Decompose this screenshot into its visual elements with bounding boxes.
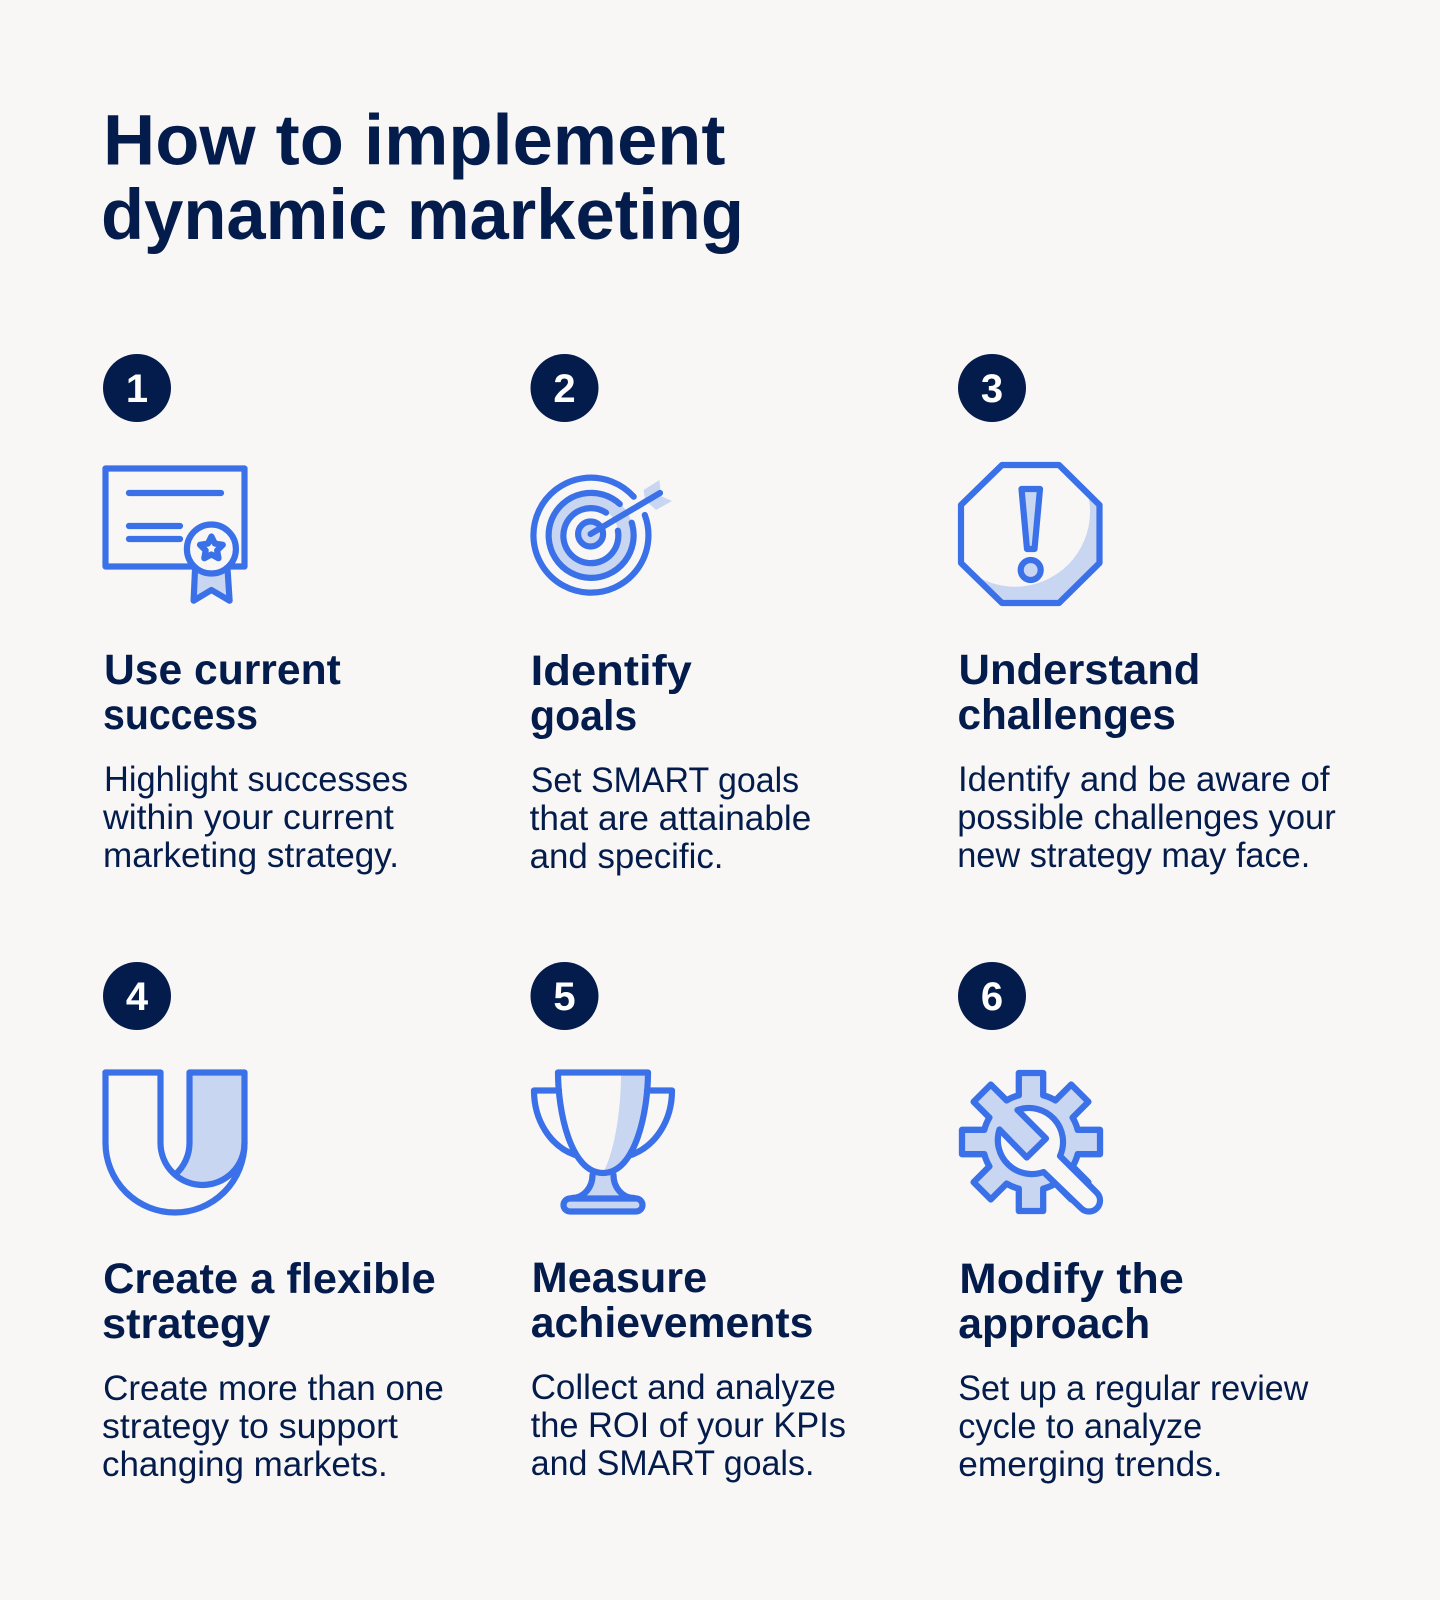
panel: step 2 identify goals bbox=[530, 354, 811, 876]
body text: and specific. bbox=[530, 837, 724, 876]
heading bbox=[531, 1254, 813, 1347]
panel: step 3 understand challenges bbox=[940, 354, 1336, 875]
body text: possible challenges your bbox=[957, 798, 1336, 837]
body text bbox=[102, 760, 408, 875]
body text bbox=[530, 761, 811, 876]
body text: marketing strategy. bbox=[103, 836, 399, 875]
icon: gear with wrench bbox=[962, 1073, 1100, 1212]
body text: that are attainable bbox=[530, 799, 811, 838]
number badge 5: 5 bbox=[553, 975, 576, 1019]
heading: Measure bbox=[532, 1254, 707, 1302]
panel: step 5 measure achievements bbox=[530, 962, 846, 1483]
number badge 3 bbox=[958, 354, 1026, 422]
heading: Use current bbox=[104, 646, 341, 694]
body text: and SMART goals. bbox=[531, 1444, 814, 1483]
body text: Identify and be aware of bbox=[958, 760, 1330, 799]
heading bbox=[958, 1255, 1184, 1348]
body text: Set up a regular review bbox=[958, 1369, 1309, 1408]
heading bbox=[102, 1255, 436, 1348]
body text: within your current bbox=[102, 798, 394, 837]
title bbox=[101, 102, 744, 255]
number badge 6 bbox=[958, 962, 1026, 1030]
body text: Create more than one bbox=[103, 1369, 444, 1408]
heading: strategy bbox=[102, 1300, 270, 1348]
number badge 2 bbox=[530, 354, 598, 422]
icon: octagon warning bbox=[958, 462, 1103, 606]
title: dynamic marketing bbox=[101, 176, 744, 255]
body text: cycle to analyze bbox=[958, 1407, 1202, 1446]
body text: Collect and analyze bbox=[531, 1368, 836, 1407]
heading: challenges bbox=[958, 691, 1176, 739]
title: How to implement bbox=[103, 102, 726, 180]
number badge 4 bbox=[103, 962, 171, 1030]
number badge 5 bbox=[530, 962, 598, 1030]
panel: step 6 modify the approach bbox=[958, 962, 1309, 1484]
body text: the ROI of your KPIs bbox=[531, 1406, 846, 1445]
panel: step 4 create a flexible strategy bbox=[102, 962, 444, 1484]
heading bbox=[103, 646, 341, 739]
heading bbox=[530, 647, 692, 740]
icon: target with arrow bbox=[533, 478, 672, 593]
body text: Highlight successes bbox=[104, 760, 408, 799]
heading: Create a flexible bbox=[103, 1255, 436, 1303]
body text: emerging trends. bbox=[958, 1445, 1223, 1484]
heading bbox=[958, 646, 1200, 739]
body text bbox=[531, 1368, 846, 1483]
heading: achievements bbox=[531, 1299, 813, 1347]
heading: success bbox=[103, 691, 258, 739]
number badge 2: 2 bbox=[553, 367, 576, 411]
heading: goals bbox=[530, 692, 637, 740]
number badge 6: 6 bbox=[981, 975, 1003, 1019]
body text bbox=[958, 1369, 1309, 1484]
body text bbox=[957, 760, 1336, 875]
icon: trophy bbox=[534, 1072, 672, 1212]
body text: new strategy may face. bbox=[957, 836, 1310, 875]
heading: Identify bbox=[531, 647, 692, 695]
number badge 3: 3 bbox=[981, 367, 1003, 411]
body text: strategy to support bbox=[102, 1407, 398, 1446]
number badge 1 bbox=[103, 354, 171, 422]
icon: certificate with medal bbox=[106, 468, 244, 601]
heading: Modify the bbox=[959, 1255, 1184, 1303]
body text: changing markets. bbox=[102, 1445, 388, 1484]
panel: step 1 use current success bbox=[102, 354, 408, 875]
icon: U-shaped magnet paths bbox=[106, 1072, 244, 1212]
number badge 4: 4 bbox=[126, 975, 149, 1019]
body text: Set SMART goals bbox=[531, 761, 799, 800]
heading: approach bbox=[958, 1300, 1150, 1348]
heading: Understand bbox=[958, 646, 1200, 694]
body text bbox=[102, 1369, 444, 1484]
number badge 1: 1 bbox=[126, 367, 148, 411]
